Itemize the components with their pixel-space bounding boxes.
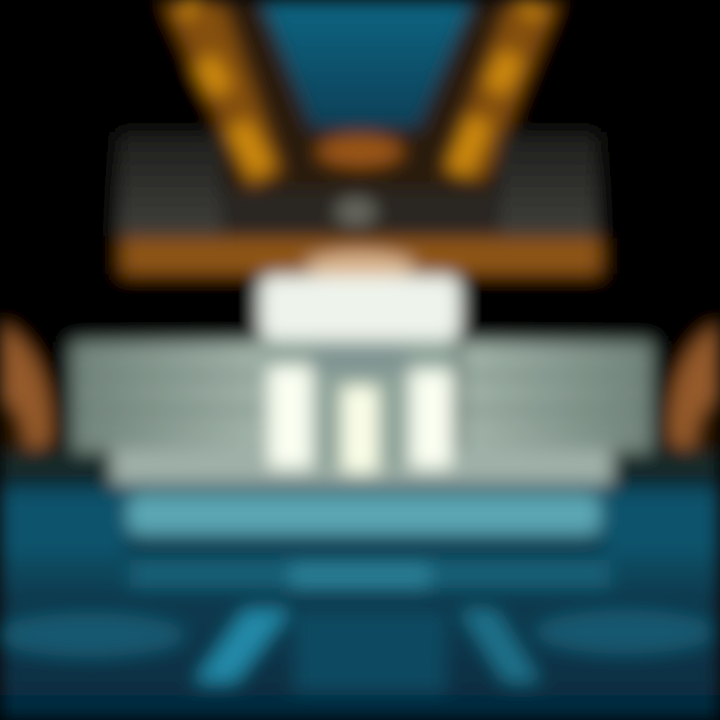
side grey panels (118, 132, 598, 238)
second step (130, 560, 610, 588)
left orange beam (164, 0, 282, 188)
light teal step (128, 494, 600, 534)
left wall (72, 342, 262, 454)
left floor tile (0, 613, 185, 657)
step highlight (290, 564, 430, 588)
center orange lamp (318, 136, 402, 166)
temple pediment (260, 276, 460, 340)
left diagonal light (195, 610, 290, 682)
dark step shadow (125, 538, 605, 556)
right arch dark opening (700, 405, 720, 465)
wall courses (72, 376, 652, 410)
left grey panel (118, 132, 223, 236)
ceiling brown frame (195, 0, 530, 195)
ceiling teal panel (262, 0, 472, 128)
centre floor tile (295, 612, 445, 692)
right arch (669, 325, 720, 450)
right wall (462, 342, 652, 454)
lintel shadow (312, 348, 408, 372)
dark band (0, 594, 720, 606)
left arch dark opening (0, 405, 20, 465)
right plinth (612, 452, 720, 480)
temple body (262, 340, 458, 470)
bottom shade (0, 695, 720, 720)
right grey panel (498, 132, 598, 236)
centre doorway (342, 386, 378, 472)
left plinth (0, 452, 110, 480)
left beam highlights (184, 4, 262, 172)
right diagonal light (460, 610, 540, 682)
centre grey panel (225, 190, 495, 238)
dome glow (305, 252, 415, 280)
orange entablature band (122, 238, 600, 274)
upper wide step (0, 494, 720, 556)
floor base (0, 484, 720, 720)
keystone (336, 198, 376, 226)
base step (112, 450, 612, 484)
right floor tile (535, 610, 715, 654)
copper arches (0, 325, 720, 480)
side walls (72, 342, 652, 454)
right orange beam (444, 0, 558, 180)
white temple (260, 252, 460, 472)
right beam highlights (458, 4, 535, 172)
left column (268, 366, 312, 468)
left arch (0, 325, 51, 450)
floor (0, 484, 720, 720)
right column (410, 370, 452, 468)
ceiling structure (164, 0, 558, 195)
